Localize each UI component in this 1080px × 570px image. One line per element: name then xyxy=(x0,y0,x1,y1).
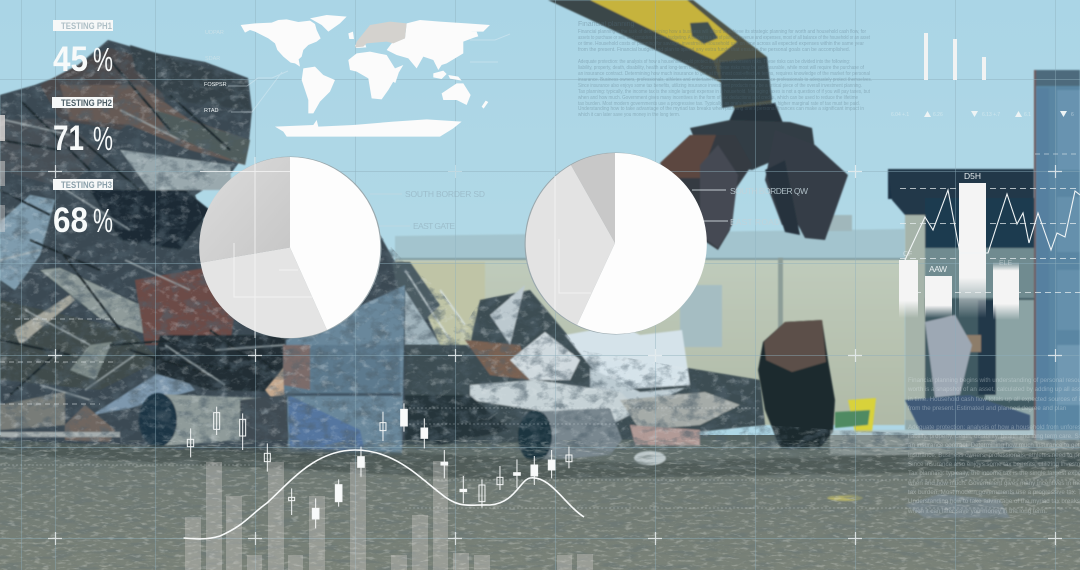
faded body text: top centre: when and how much. Government gives many incentives in the form of tax deductions and credits, which can be used to reduce the lifetime xyxy=(577,95,858,101)
faded pie labels: left xyxy=(370,189,485,231)
stat: testing PH3 68%: 68 xyxy=(53,201,88,240)
yellow bucket xyxy=(835,398,876,432)
faded pie labels: right xyxy=(692,186,808,227)
faded body text: top centre: an insurance contract. Determining how much insurance to get, at the most cost-effective terms, requires knowledge of the market for personal xyxy=(578,71,870,77)
faded body text: top centre: Adequate protection: the analysis of how a household could protect itself from unforeseen risks. These risks can be divided into the following: xyxy=(578,59,850,65)
ticker row with triangles: 6.1 xyxy=(1024,112,1031,118)
bar labels: AAW xyxy=(929,264,947,274)
faded pie labels: left: SOUTH BORDER SD xyxy=(405,189,485,199)
map: South America xyxy=(302,67,335,113)
faded body text: top centre: Financial planning xyxy=(578,21,635,28)
faded body text: bottom right xyxy=(907,377,1080,515)
stat: testing PH2 71%: TESTING PH2 xyxy=(61,98,112,108)
faded body text: top centre: liability, property, death, disability, health and long-term care. Some of these risks may be self-insurable, while most will require the purchase of xyxy=(578,65,864,71)
map: highlighted Europe xyxy=(355,22,407,47)
texture: ground grain xyxy=(0,440,1080,570)
warehouse roof xyxy=(395,215,905,262)
dashed guide lines xyxy=(900,188,1080,292)
building at right xyxy=(888,169,1036,430)
central scrap xyxy=(405,285,765,462)
edge marker bars xyxy=(0,115,5,232)
map callout labels xyxy=(204,30,510,114)
faded body text: top centre: assets to purchase or sell, and considers income budgeting. A budget is a list of planned revenue and expenses, most of all balance of the household or an asset xyxy=(578,35,870,41)
faded body text: top centre: Tax planning: typically, the income tax is the single largest expense in a household. Managing taxes is not a question of if you will pay taxes, but xyxy=(578,89,870,95)
map: islands xyxy=(348,32,488,109)
left scrap pile xyxy=(0,40,440,455)
shipping container xyxy=(1034,70,1080,440)
map callout labels: UDPAR xyxy=(205,30,224,36)
faded body text: top centre: which it can later save you money in the long term. xyxy=(577,112,680,118)
world map xyxy=(241,15,490,137)
stat: testing PH2 71%: % xyxy=(93,120,113,157)
map: North America xyxy=(241,19,321,67)
crane arm and grapple xyxy=(548,0,848,250)
map: Antarctica xyxy=(275,119,462,137)
ticker row with triangles: 6.13 +.7 xyxy=(982,112,1000,118)
faded pie labels: right: SOUTH BORDER QW xyxy=(730,186,808,196)
map: Australia xyxy=(442,83,471,105)
faded body text: top centre: or time. Household costs of planning for savings, investment, household use on time across all expected expenses within the same year xyxy=(578,41,864,47)
bar labels: ELE xyxy=(999,260,1013,267)
map: Greenland xyxy=(310,15,347,32)
pie chart left xyxy=(199,156,382,338)
stat: testing PH3 68%: TESTING PH3 xyxy=(61,180,112,190)
map callout labels: FOSPSR xyxy=(204,82,227,88)
stat: testing PH1 45%: 45 xyxy=(53,40,88,79)
stat: testing PH2 71% xyxy=(52,97,113,158)
faded body text: top centre: Financial planning is the task of determining how a business will afford to achieve its strategic planning for worth and household cash flow, for xyxy=(578,29,866,35)
map: Africa xyxy=(348,52,403,99)
bar labels xyxy=(903,171,1013,274)
ticker row with triangles: 6.04 +.1 xyxy=(891,112,909,118)
faded body text: top centre: insurance. Business owners, professionals, athletes and entertainers require specialized insurance professionals to adequately protect themselves. xyxy=(578,77,872,83)
bars xyxy=(899,183,1019,320)
stat: testing PH2 71%: 71 xyxy=(53,119,84,158)
faded pie labels: right: EAST ROAD xyxy=(730,217,780,227)
ground xyxy=(0,435,1080,570)
shredded scrap column xyxy=(758,320,835,448)
faded body text: bottom right: from the present. Estimated and planned degree and plan xyxy=(908,405,1067,412)
faded body text: top centre: Understanding how to take advantage of the myriad tax breaks when planning one's personal finances can make a significant impact in xyxy=(578,106,864,112)
pile debris strokes xyxy=(0,60,750,425)
stat: testing PH1 45%: % xyxy=(93,41,113,78)
texture: scrap grain xyxy=(0,40,1080,450)
sky xyxy=(0,0,1080,300)
ground debris xyxy=(0,395,1080,518)
faded pie labels: left: EAST GATE xyxy=(413,221,455,231)
faded body text: top centre xyxy=(577,21,872,118)
stat: testing PH1 45%: TESTING PH1 xyxy=(61,21,112,31)
stat: testing PH3 68% xyxy=(53,179,113,240)
warehouse wall xyxy=(395,258,905,425)
bar labels: D5H xyxy=(964,171,981,181)
map callout labels: SDAR xyxy=(205,56,220,62)
pie chart right xyxy=(524,152,707,334)
stat: testing PH1 45% xyxy=(53,20,113,79)
trend curve xyxy=(184,450,584,539)
faded body text: bottom right: which it can later save you money in the long term. xyxy=(907,508,1047,515)
testing phase stats xyxy=(52,20,113,240)
pipe section xyxy=(139,393,288,447)
candlestick chart xyxy=(187,403,572,528)
ticker row with triangles: 6 xyxy=(1071,112,1074,118)
faded body text: top centre: tax burden. Most modern governments use a progressive tax. Typically, as one's income grows, a higher marginal rate of tax must be paid. xyxy=(578,101,860,107)
ticker row with triangles: 6.26 xyxy=(933,112,943,118)
stat: testing PH3 68%: % xyxy=(93,202,113,239)
oil drum xyxy=(265,285,405,455)
faded body text: top centre: from the present. Financial budget and plan to spend any extra funds that ensures the personal goals can be accomplished. xyxy=(578,47,850,53)
line chart xyxy=(905,190,1080,260)
bottom faded bar chart xyxy=(185,461,593,570)
small top-right bar chart xyxy=(924,33,986,80)
bar labels: CF xyxy=(903,251,912,258)
faded body text: top centre: Since insurance also enjoys some tax benefits, utilizing insurance investment products may be a critical piece of the overall investment planning. xyxy=(578,83,862,89)
right bar chart with line xyxy=(899,171,1080,320)
map callout labels: RTAD xyxy=(204,108,218,114)
ticker row with triangles xyxy=(891,111,1074,118)
map: Asia xyxy=(387,20,490,70)
